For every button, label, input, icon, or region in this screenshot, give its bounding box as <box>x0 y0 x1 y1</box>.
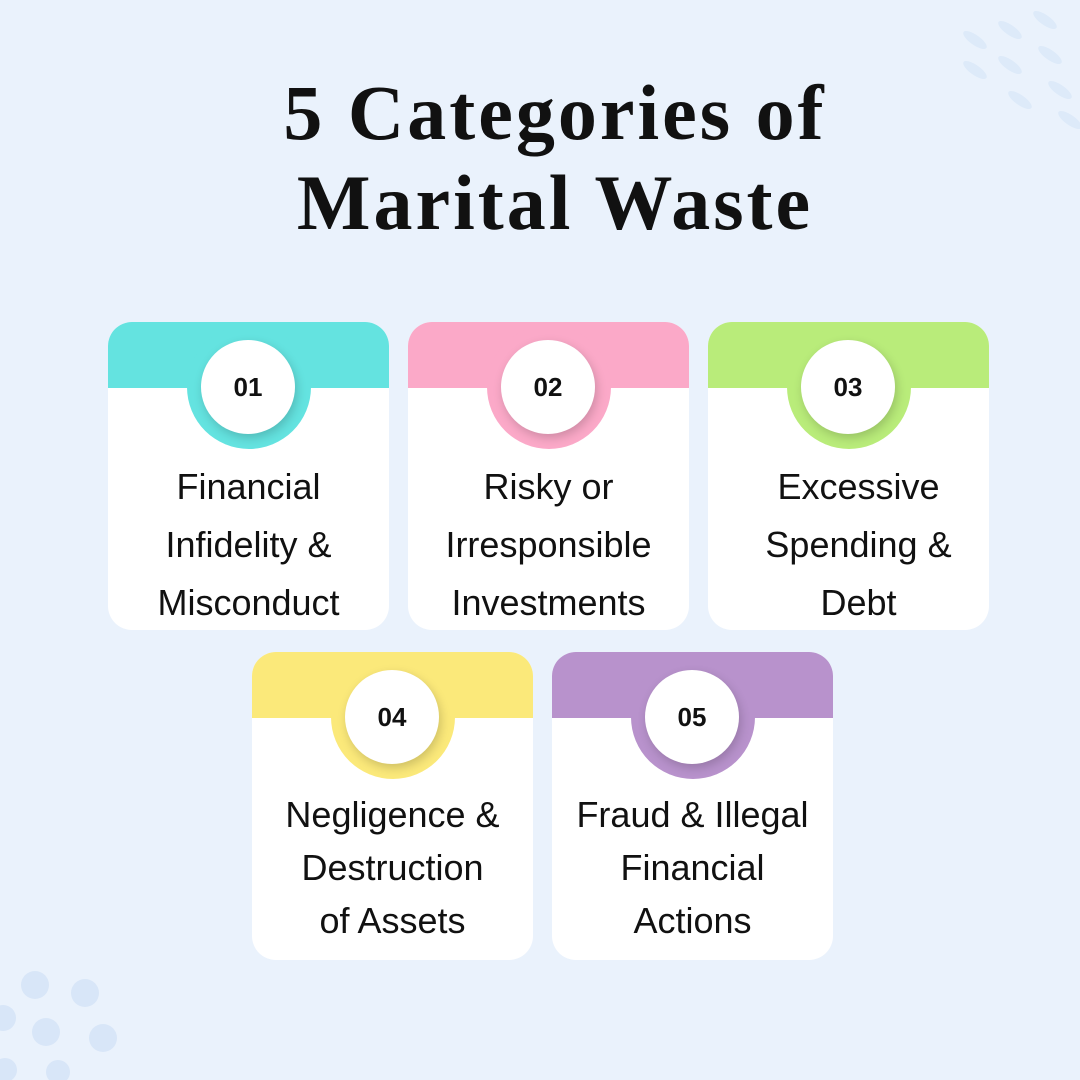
text 05: Financial <box>620 847 765 888</box>
text 03: Spending & <box>765 524 952 565</box>
card 01 <box>108 322 389 630</box>
text 05 <box>576 794 809 941</box>
text 03 <box>765 466 952 623</box>
card 03 <box>708 322 989 630</box>
text 02 <box>445 466 652 623</box>
number badge 05 <box>645 670 739 764</box>
text 01 <box>157 466 340 623</box>
text 01: Infidelity & <box>165 524 332 565</box>
number badge 04 <box>345 670 439 764</box>
text 04: of Assets <box>319 900 466 941</box>
card 05 <box>552 652 833 960</box>
decoration: top right dashes <box>964 11 1080 129</box>
text 02: Risky or <box>483 466 614 507</box>
decoration: bottom left dots <box>0 971 117 1080</box>
number badge 02: 02 <box>534 372 562 402</box>
text 02: Investments <box>451 582 646 623</box>
text 03: Debt <box>820 582 897 623</box>
number badge 03 <box>801 340 895 434</box>
number badge 02 <box>501 340 595 434</box>
text 04: Destruction <box>301 847 484 888</box>
number badge 05: 05 <box>678 702 706 732</box>
number badge 04: 04 <box>378 702 406 732</box>
text 05: Actions <box>633 900 752 941</box>
text 01: Misconduct <box>157 582 340 623</box>
title <box>283 69 827 246</box>
text 04 <box>285 794 500 941</box>
number badge 01 <box>201 340 295 434</box>
card 04 <box>252 652 533 960</box>
number badge 01: 01 <box>234 372 262 402</box>
card 02 <box>408 322 689 630</box>
title: Marital Waste <box>297 159 813 246</box>
text 01: Financial <box>176 466 321 507</box>
title: 5 Categories of <box>283 69 827 156</box>
number badge 03: 03 <box>834 372 862 402</box>
text 03: Excessive <box>777 466 940 507</box>
text 04: Negligence & <box>285 794 500 835</box>
text 02: Irresponsible <box>445 524 652 565</box>
text 05: Fraud & Illegal <box>576 794 809 835</box>
